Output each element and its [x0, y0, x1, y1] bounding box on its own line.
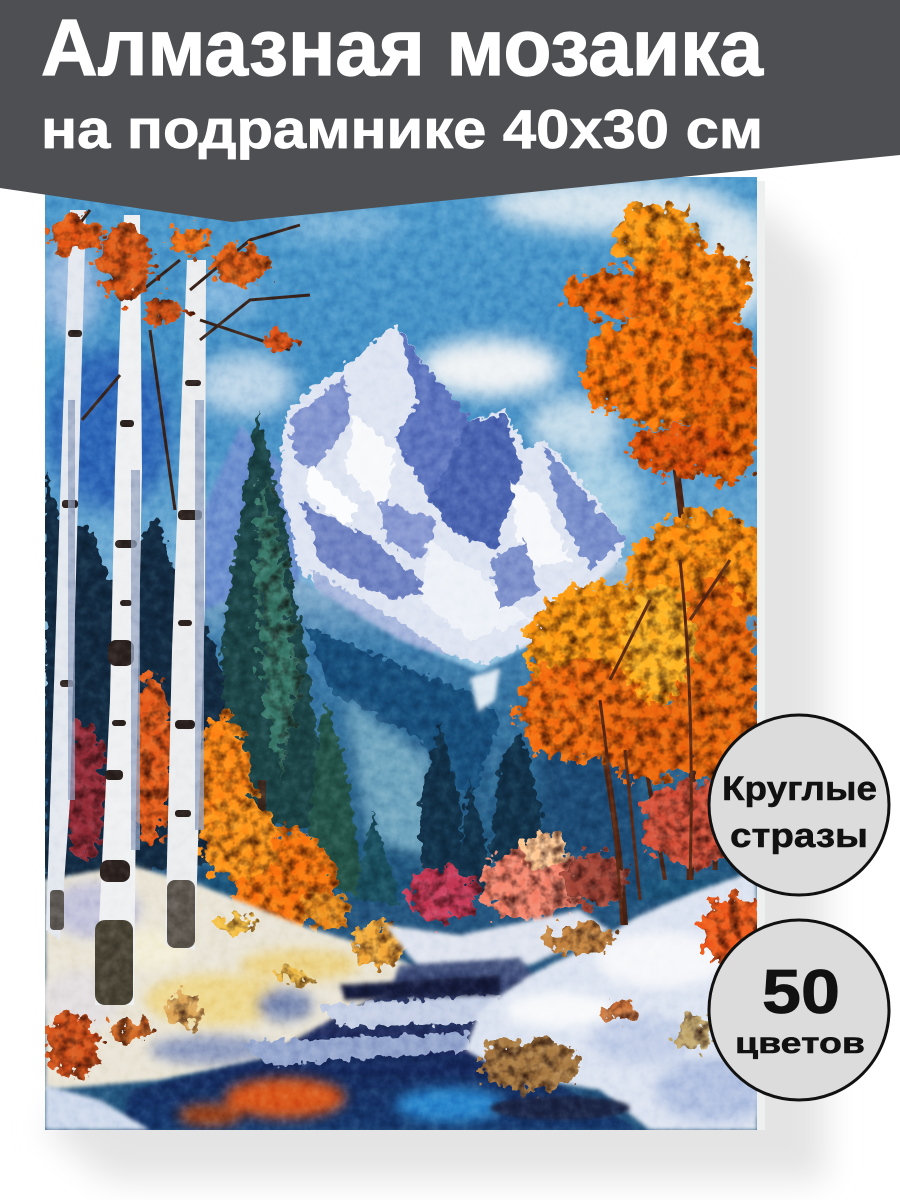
title: Алмазная мозаика	[41, 3, 763, 92]
right autumn foliage	[518, 203, 780, 780]
snow bank right	[465, 870, 757, 1130]
mountain	[280, 325, 625, 665]
snow center behind the stream	[385, 910, 610, 970]
canvas paint texture	[45, 177, 757, 1130]
mid spruces	[305, 700, 542, 905]
red shrubs under the right trees	[565, 783, 750, 908]
birch trunks	[46, 210, 206, 1005]
valley forest	[200, 560, 760, 900]
snow foreground bottom left	[45, 1085, 150, 1130]
badge: round rhinestones	[709, 715, 889, 895]
dry grass and small shrubs	[46, 894, 769, 1091]
badge: round rhinestones: Круглые	[722, 770, 877, 808]
birch branches	[60, 210, 310, 510]
sky	[45, 177, 757, 697]
badge: 50 colours: цветов	[735, 1027, 865, 1060]
painting base	[45, 699, 757, 1130]
orange bush left	[192, 715, 350, 930]
clouds	[40, 177, 773, 550]
snow foreground left	[45, 865, 430, 1090]
spruce big	[222, 410, 318, 830]
painting: autumn mountain landscape	[40, 177, 780, 1130]
birch foliage	[47, 217, 298, 350]
canvas drop shadow	[45, 181, 825, 1180]
header banner	[0, 0, 900, 222]
right autumn tree trunks	[600, 430, 740, 925]
subtitle: на подрамнике 40х30 см	[41, 98, 763, 160]
stream	[120, 958, 640, 1130]
left dark forest	[45, 469, 226, 880]
shrubs in the valley	[63, 675, 589, 923]
far ridge	[204, 426, 302, 610]
water reflections	[178, 1078, 505, 1126]
right trunks over foliage	[600, 560, 730, 925]
badge: round rhinestones: стразы	[730, 817, 868, 855]
badge: 50 colours	[709, 920, 889, 1100]
badge: 50 colours: 50	[762, 958, 840, 1027]
